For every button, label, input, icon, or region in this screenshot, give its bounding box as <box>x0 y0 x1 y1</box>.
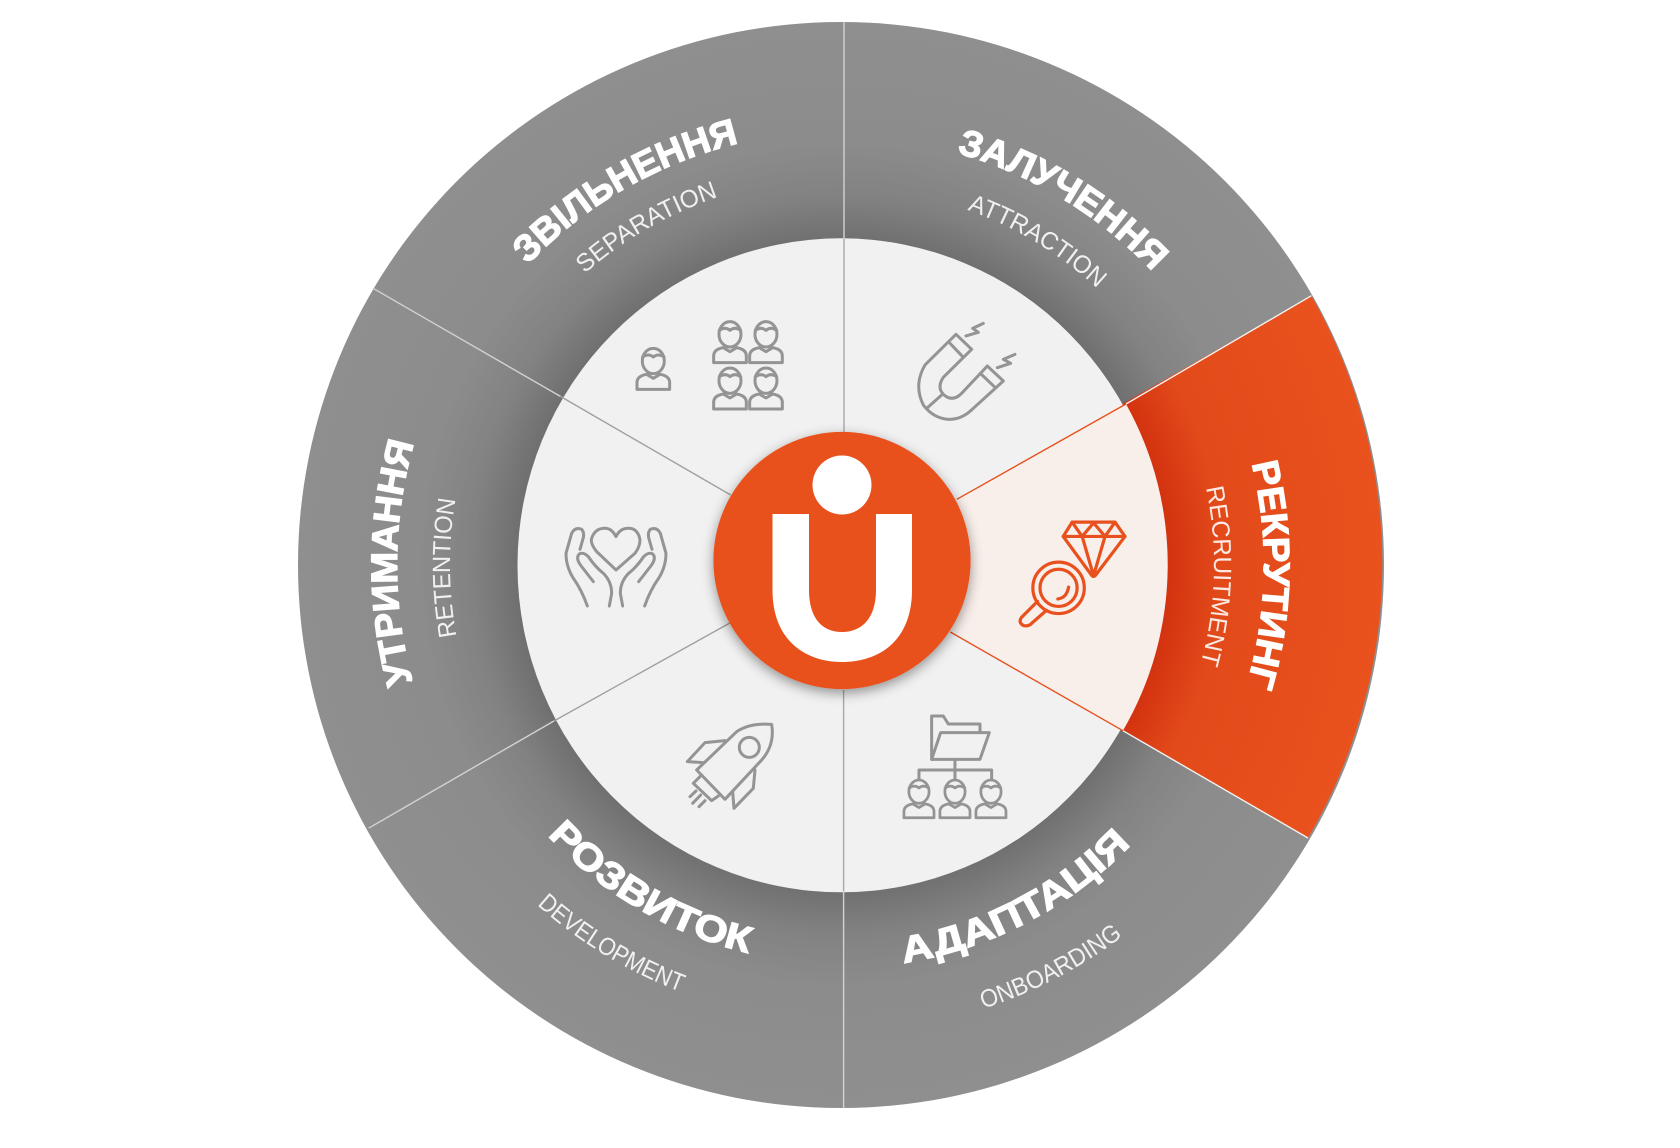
label: separation: ЗВІЛЬНЕННЯ <box>514 118 738 261</box>
inner sector: recruitment tint <box>841 404 1168 731</box>
label: retention: УТРИМАННЯ <box>370 438 414 690</box>
label: retention <box>370 438 456 690</box>
central logo <box>713 432 971 689</box>
label: retention: RETENTION <box>432 498 456 638</box>
label: onboarding: АДАПТАЦІЯ <box>904 828 1130 964</box>
icon: hands holding heart <box>566 528 666 606</box>
icon: rocket <box>687 724 772 808</box>
label: recruitment <box>1202 460 1290 692</box>
label: separation: SEPARATION <box>576 181 716 271</box>
label: onboarding: ONBOARDING <box>980 926 1120 1007</box>
icon: people, one separated from group <box>637 322 782 409</box>
label: recruitment: RECRUITMENT <box>1202 486 1232 668</box>
inner disc <box>518 238 1164 892</box>
outer sector: recruitment highlight <box>841 296 1382 838</box>
label: development: DEVELOPMENT <box>538 893 686 990</box>
icon: magnet <box>919 323 1015 419</box>
label: attraction: ЗАЛУЧЕННЯ <box>958 130 1170 270</box>
label: development: РОЗВИТОК <box>548 818 756 954</box>
label: attraction: ATTRACTION <box>967 196 1108 288</box>
icon: folder with team <box>904 716 1006 818</box>
icon: gem and magnifier <box>1020 522 1125 626</box>
label: recruitment: РЕКРУТИНГ <box>1250 460 1290 692</box>
outer ring: grey sectors <box>298 22 1384 1108</box>
